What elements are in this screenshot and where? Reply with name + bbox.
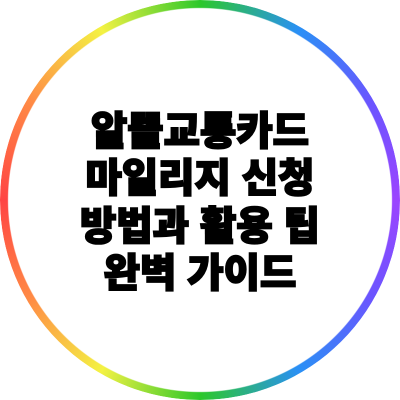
title line 4: 완벽 가이드 — [104, 252, 296, 296]
title line 1: 알뜰교통카드 — [91, 110, 309, 154]
title line 3: 방법과 활용 팁 — [80, 205, 320, 249]
title line 2: 마일리지 신청 — [85, 157, 314, 201]
